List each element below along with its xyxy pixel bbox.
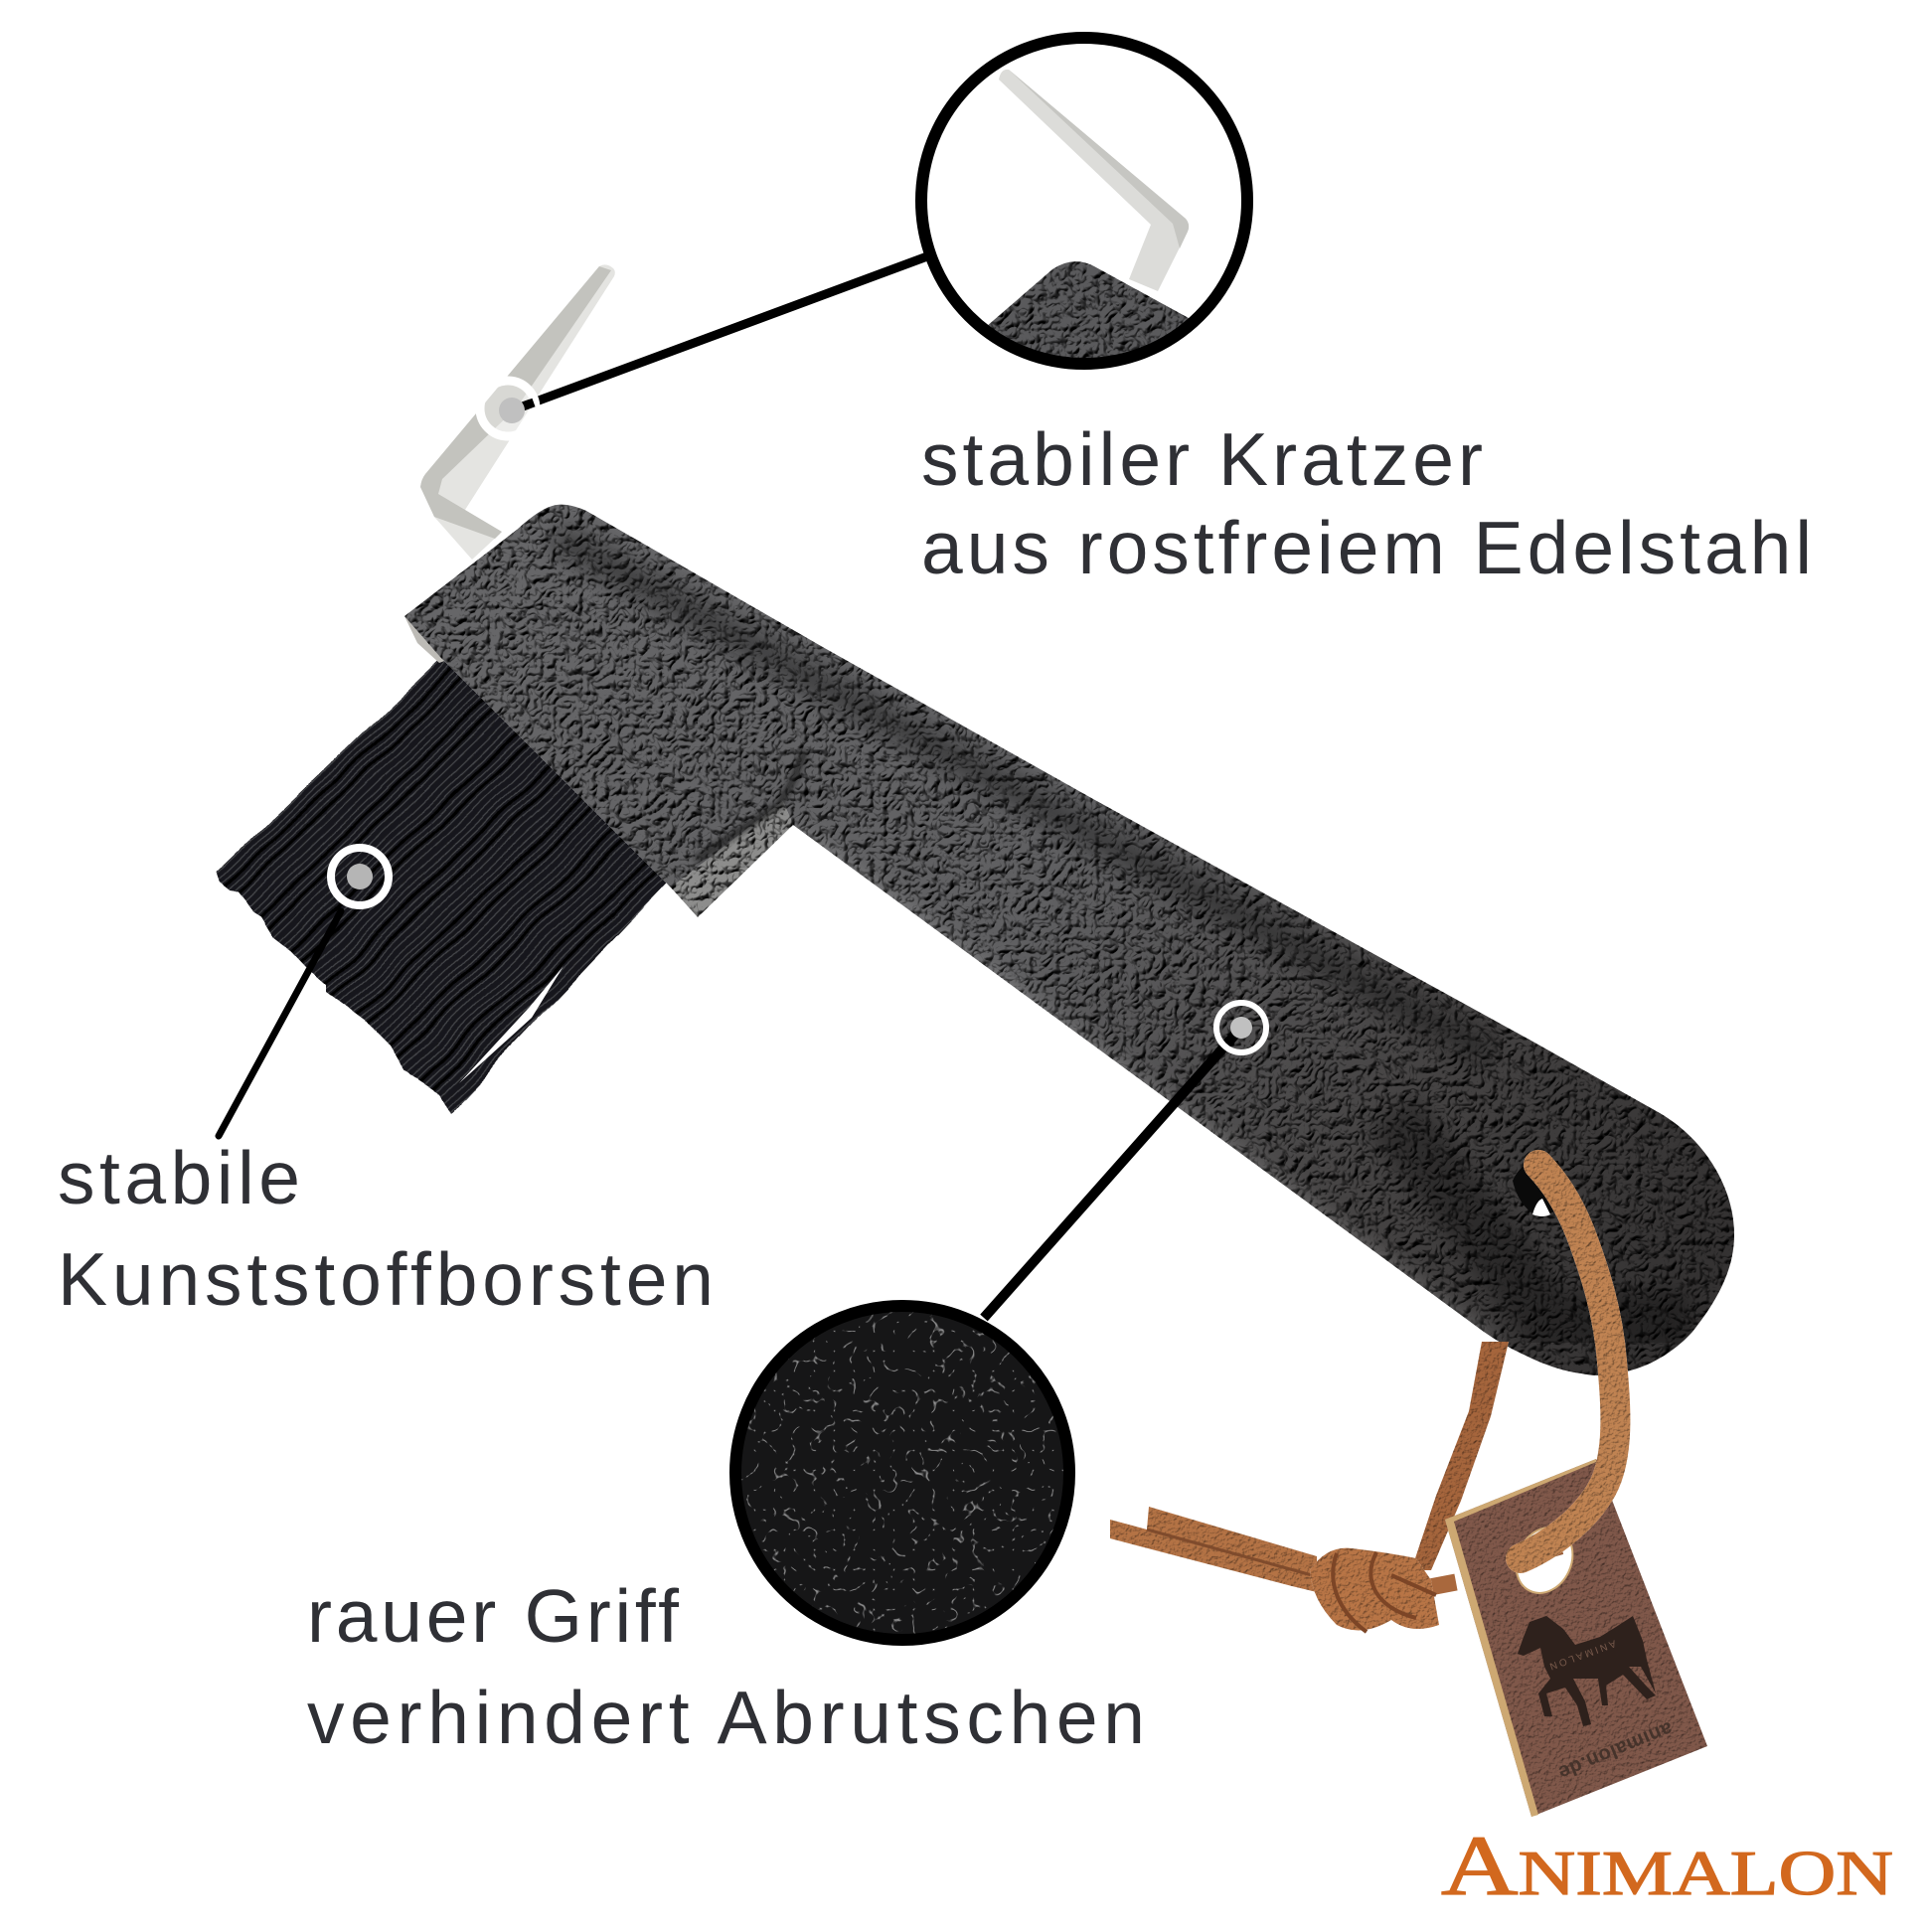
logo: Animalon: ANIMALON <box>1441 1818 1893 1913</box>
tails <box>1110 1507 1317 1592</box>
tag: body <box>1445 1459 1707 1817</box>
knot <box>1310 1548 1439 1630</box>
marker ring <box>331 848 389 905</box>
handle: bevel sides <box>404 616 793 917</box>
inset circle: grip texture <box>735 1306 1069 1640</box>
knot grooves <box>1333 1552 1436 1632</box>
text: grip label: rauer Griff <box>307 1574 679 1658</box>
text: grip label <box>307 1574 1145 1759</box>
text: scraper label: aus rostfreiem Edelstahl <box>921 506 1812 589</box>
marker dot <box>499 398 525 423</box>
tag: stamped horse text: ANIMALON <box>1548 1637 1617 1672</box>
leader line <box>219 911 341 1136</box>
leather strap: loop through hole <box>1521 1165 1615 1562</box>
tag: cut edge <box>1445 1459 1596 1817</box>
text: grip label: verhindert Abrutschen <box>307 1676 1145 1759</box>
text: bristles label <box>58 1136 714 1321</box>
marker dot <box>347 864 373 889</box>
strap: band behind hole <box>1522 1550 1562 1562</box>
scraper: folded edge <box>420 266 611 539</box>
text: scraper label <box>921 417 1812 589</box>
leader stub inside ring <box>512 402 534 410</box>
handle <box>404 505 1734 1375</box>
handle: crease at neck <box>696 750 805 860</box>
marker ring <box>480 381 536 436</box>
handle: shading bands <box>557 537 1690 1342</box>
text: bristles label: stabile <box>58 1136 300 1219</box>
strap: main loop <box>1521 1165 1615 1558</box>
leather strap: knot and tails <box>1110 1507 1456 1632</box>
inset circle: scraper detail <box>920 37 1248 378</box>
tag: horse logo <box>1518 1616 1656 1726</box>
marker ring <box>1216 1003 1266 1052</box>
bristles <box>219 656 671 1113</box>
tag: stamped url: animalon.de <box>1555 1717 1676 1784</box>
leather strap: rear strand <box>1411 1342 1509 1570</box>
text: scraper label: stabiler Kratzer <box>921 417 1483 501</box>
scraper: stainless steel blade <box>420 264 615 560</box>
leader line <box>512 256 927 410</box>
callout: bristle marker and leader <box>219 848 389 1136</box>
handle: textured body <box>404 505 1734 1375</box>
strand to tag <box>1414 1582 1456 1590</box>
scraper: blade face <box>420 264 615 560</box>
marker dot <box>1230 1017 1252 1039</box>
callout: handle marker and leader <box>984 1003 1266 1318</box>
callout: scraper marker and leader <box>480 256 927 436</box>
text: bristles label: Kunststoffborsten <box>58 1237 714 1321</box>
leather tag <box>1445 1459 1707 1817</box>
handle: hanging hole <box>1513 1160 1562 1218</box>
tail groove <box>1147 1530 1312 1575</box>
leader line <box>984 1028 1241 1318</box>
tag: hole <box>1506 1519 1583 1602</box>
